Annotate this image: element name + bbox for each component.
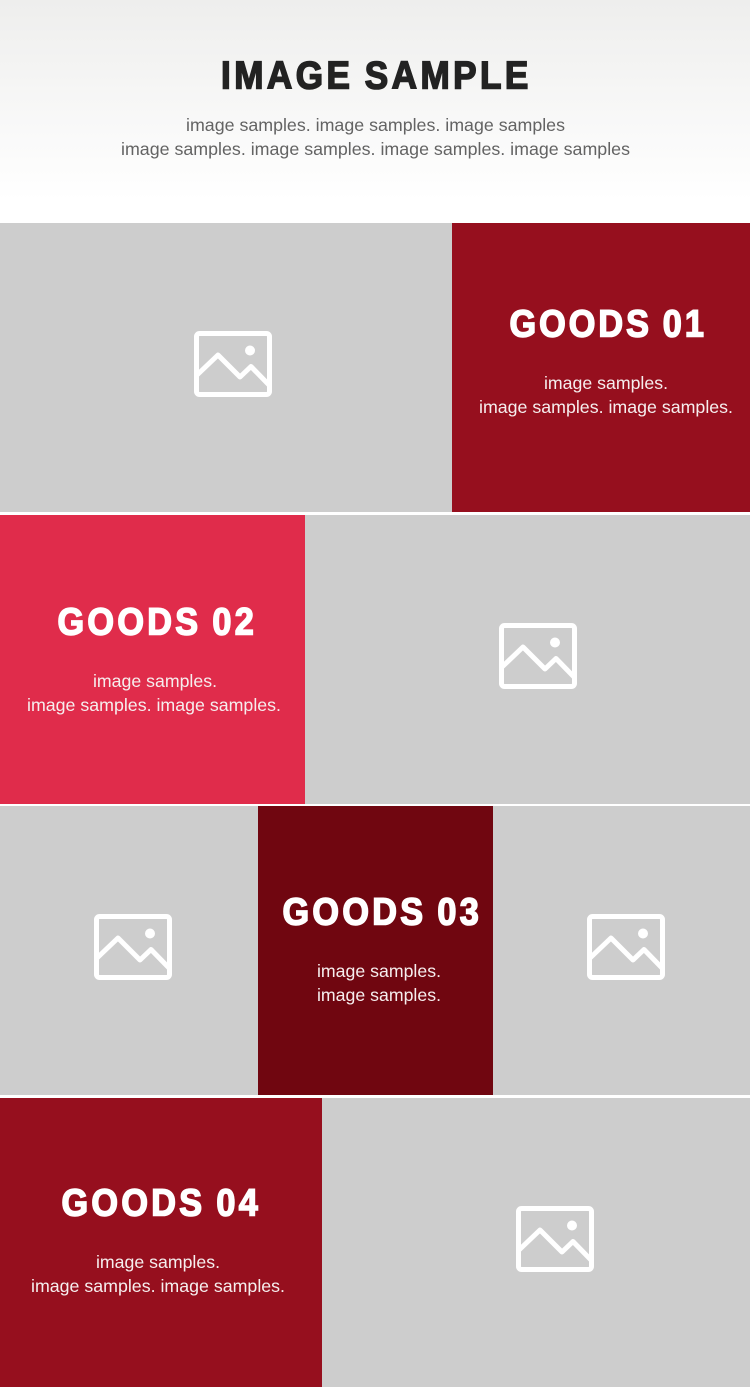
icon: image: [196, 334, 270, 394]
header panel: [0, 0, 750, 223]
panel: goods 04: GOODS 04: [62, 1181, 261, 1224]
row 4: goods 04: [0, 1098, 750, 1387]
row 3: goods 03: [0, 806, 750, 1095]
image placeholder: [0, 223, 452, 512]
panel: goods 02: image samples. image samples.: [27, 695, 281, 715]
panel: goods 03: GOODS 03: [282, 890, 482, 933]
panel: goods 03: [258, 806, 493, 1095]
icon: image: [518, 1208, 592, 1270]
image placeholder right: [493, 806, 750, 1095]
image placeholder left: [0, 806, 258, 1095]
panel: goods 03: image samples.: [317, 985, 441, 1005]
panel: goods 02: GOODS 02: [58, 600, 257, 643]
image placeholder: [322, 1098, 750, 1387]
panel: goods 01: [452, 223, 750, 512]
panel: goods 04: [0, 1098, 322, 1387]
icon: image: [502, 626, 575, 686]
image placeholder: [305, 515, 750, 804]
row 2: goods 02: [0, 515, 750, 804]
row 1: goods 01: [0, 223, 750, 512]
subtitle: image samples. image samples. image samples. image samples: [121, 139, 630, 159]
panel: goods 02: image samples.: [93, 671, 217, 691]
icon: image: [96, 916, 170, 978]
panel: goods 04: image samples. image samples.: [31, 1276, 285, 1296]
panel: goods 02: [0, 515, 305, 804]
subtitle: image samples. image samples. image samples: [186, 115, 565, 135]
panel: goods 03: image samples.: [317, 961, 441, 981]
title: IMAGE SAMPLE: [221, 53, 532, 97]
panel: goods 01: image samples. image samples.: [479, 397, 733, 417]
panel: goods 04: image samples.: [96, 1252, 220, 1272]
panel: goods 01: image samples.: [544, 373, 668, 393]
subtitle: [121, 115, 630, 159]
icon: image: [590, 916, 663, 978]
panel: goods 01: GOODS 01: [510, 302, 707, 345]
